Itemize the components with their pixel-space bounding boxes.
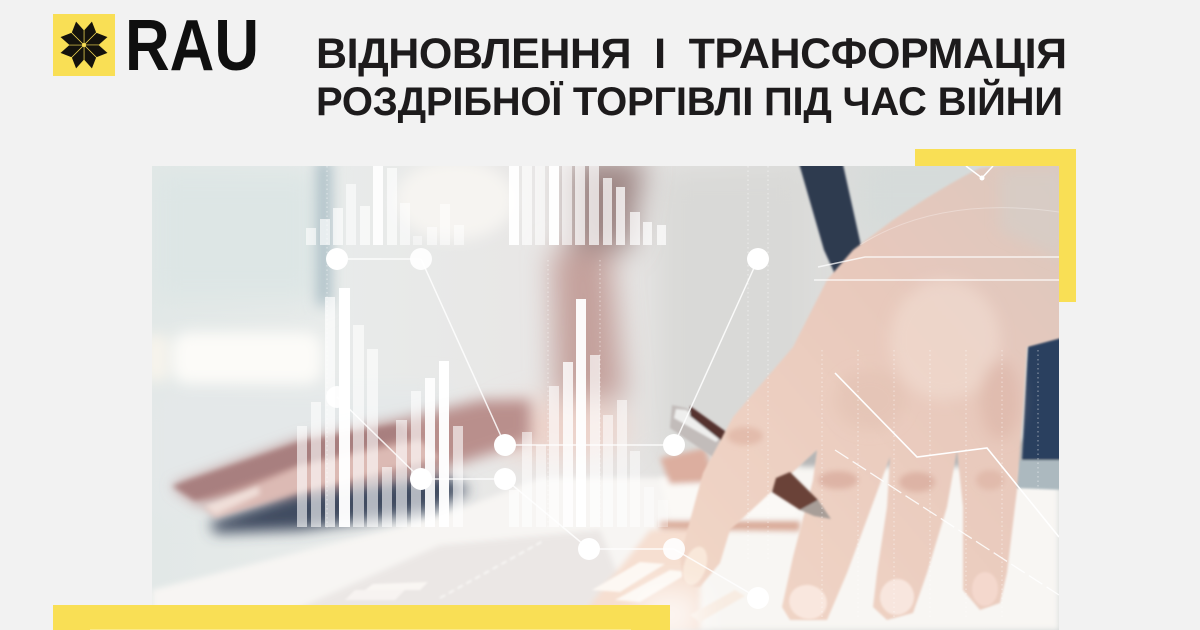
lower left bars chart (297, 288, 463, 527)
table and tablet (152, 440, 1059, 630)
top right bars chart (509, 166, 666, 245)
right hand (680, 160, 1065, 620)
data point circles (326, 248, 769, 609)
dark tie and dark shirt (798, 160, 1065, 490)
trend lines over hand (814, 166, 1059, 595)
lower middle bars chart (509, 299, 668, 527)
connector lines (337, 259, 758, 598)
logo square (53, 14, 115, 76)
white fade at table bottom (640, 590, 700, 630)
cropped banner text tops (90, 629, 631, 630)
photo: hands over charts (145, 160, 1065, 630)
paper and small reddish edge (660, 448, 800, 531)
logo (53, 6, 259, 86)
pen tip (772, 472, 831, 519)
title line 1: ВІДНОВЛЕННЯ І ТРАНСФОРМАЦІЯ (316, 30, 1067, 78)
icon: eight-point star (60, 21, 108, 69)
top small bars chart (306, 166, 464, 245)
yellow frame accent (915, 149, 1076, 302)
left hand (172, 400, 530, 533)
title line 2: РОЗДРІБНОЇ ТОРГІВЛІ ПІД ЧАС ВІЙНИ (316, 78, 1063, 124)
pen upper part (670, 404, 726, 456)
logo wordmark: RAU (125, 6, 259, 86)
title (316, 30, 1067, 124)
dotted gridlines (327, 166, 1038, 620)
bottom yellow banner (53, 605, 670, 630)
finger nails (683, 546, 998, 619)
